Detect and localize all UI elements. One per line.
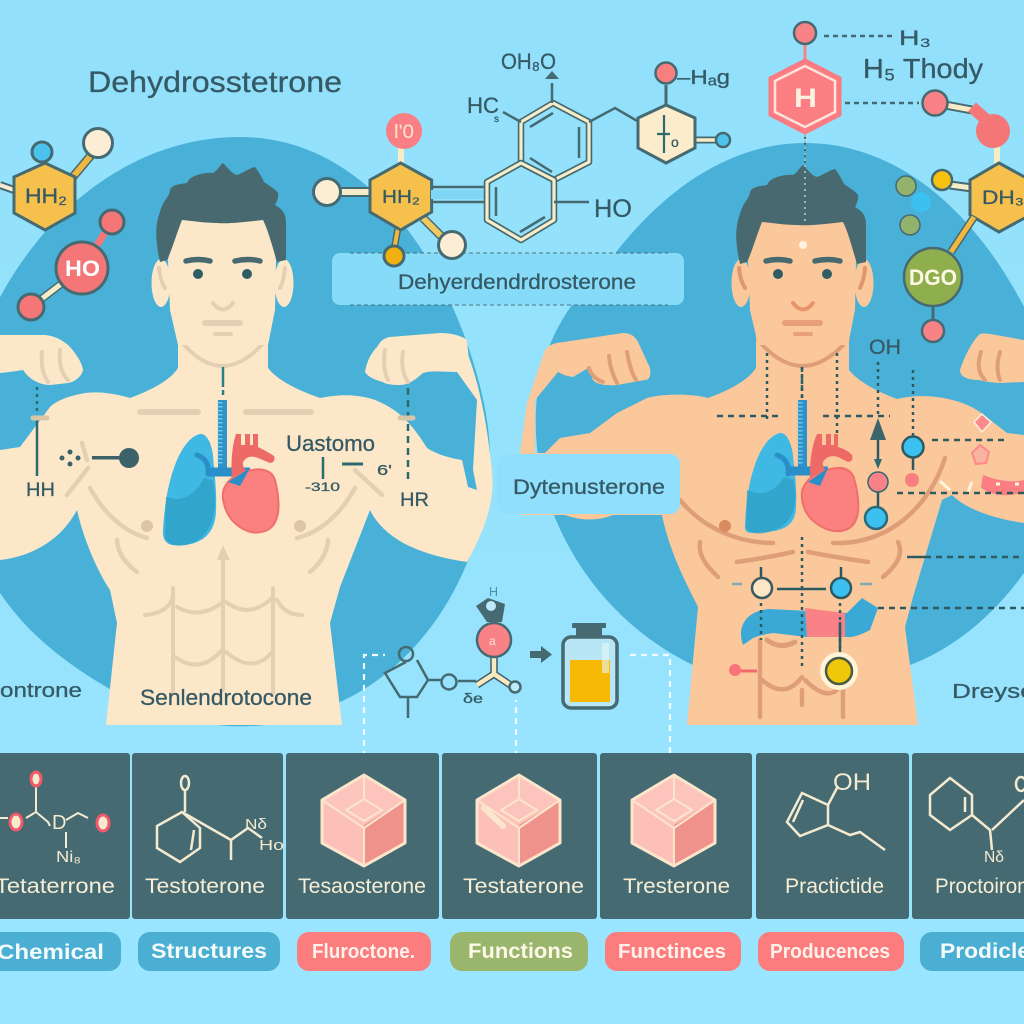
left figure marker with dots	[60, 448, 139, 468]
left label: HR: HR	[400, 490, 429, 511]
left torso and arms	[0, 300, 493, 725]
stomach	[741, 598, 878, 645]
molecule: right chain	[896, 90, 1024, 342]
left figure trachea	[208, 367, 250, 472]
left label: HH	[26, 387, 55, 501]
right figure heart	[802, 434, 858, 531]
card 5	[600, 753, 752, 919]
molecule: HO coral	[18, 210, 124, 320]
right figure arrow head down	[874, 459, 882, 469]
right figure trachea	[788, 367, 828, 471]
card 2: Nδ	[245, 816, 267, 833]
label: Dytenusterone	[497, 454, 680, 514]
molecule: right chain: DGO	[909, 265, 957, 290]
pill: Functions	[450, 932, 588, 971]
right figure left fist	[545, 333, 650, 385]
left label: Ustomo: 6'	[377, 462, 392, 479]
card 6	[756, 753, 909, 919]
label: Dehyerdendrdrosterone: Dehyerdendrdrosterone	[398, 271, 636, 294]
title: Dehydrosstetrone	[88, 66, 342, 99]
dashed connectors	[364, 655, 670, 768]
card 1	[0, 753, 130, 919]
HO label	[554, 201, 589, 203]
label: Dytenusterone: Dytenusterone	[513, 476, 665, 499]
molecule: top hexagon H: H₃	[899, 27, 931, 50]
left label: Ustomo: -310	[305, 480, 340, 494]
card 7	[912, 753, 1024, 919]
pill: Functions: Functions	[468, 940, 573, 963]
pill: Chemical	[0, 932, 121, 971]
connecting bond and cream hexagon	[589, 108, 639, 122]
pill: Structures: Structures	[151, 940, 267, 963]
molecule: right chain: DH₃	[982, 188, 1024, 209]
card 3: Tesaosterone	[298, 875, 426, 898]
molecule: central yellow hexagon with fused rings	[314, 49, 730, 266]
card 2: Ho	[259, 837, 284, 854]
right figure pink organ details	[905, 414, 1024, 495]
left label: Ustomo: Uastomo	[286, 431, 375, 456]
label: HS Thody: H₅ Thody	[863, 53, 983, 84]
pill: Flurotone	[297, 932, 431, 971]
left figure center arrow head	[217, 545, 230, 560]
left figure lung	[163, 434, 216, 546]
right figure body contour lines	[589, 340, 1000, 717]
bottom cards	[0, 753, 1024, 919]
icon: jar	[563, 623, 617, 708]
right figure	[520, 165, 1024, 725]
card 7: Nδ	[984, 849, 1004, 866]
card 2: Testoterone	[145, 875, 265, 898]
bottom pills	[0, 932, 1024, 971]
right figure arrow	[870, 418, 886, 440]
molecule: central yellow hexagon with fused rings: HO	[594, 195, 632, 223]
left figure left fist	[0, 335, 83, 385]
right figure connector lines	[717, 353, 1024, 667]
card 5: Tresterone	[623, 875, 730, 898]
molecule: central yellow hexagon with fused rings: o	[671, 134, 679, 150]
panel: right background circle	[536, 143, 1024, 665]
pill: Producences: Producences	[770, 941, 890, 963]
card 4: Testaterone	[463, 875, 584, 898]
left figure right fist	[365, 333, 470, 385]
pill: Prodicle	[920, 932, 1024, 971]
OH2O label: OH₈O	[501, 49, 556, 74]
left figure	[0, 163, 493, 725]
pill: Functinces: Functinces	[618, 941, 726, 963]
arrow	[530, 646, 552, 663]
left side caption: ontrone	[0, 680, 82, 702]
card 6: OH	[833, 769, 871, 796]
right figure right fist	[960, 333, 1024, 383]
pill: Producences	[758, 932, 904, 971]
molecule: HO coral: HO	[65, 256, 100, 281]
right figure head	[732, 165, 874, 345]
card 2	[132, 753, 284, 919]
left label: Ustomo	[286, 431, 392, 494]
molecule: top hexagon H: H	[794, 83, 817, 113]
pill: Structures	[138, 932, 280, 971]
molecule: central yellow hexagon with fused rings: l'0	[394, 122, 414, 143]
molecule: bottom center: a	[489, 634, 496, 648]
molecule: central yellow hexagon with fused rings: s	[494, 114, 499, 125]
pill: Prodicle: Prodicle	[940, 940, 1024, 963]
card 1: Ni₈	[56, 849, 81, 866]
right figure lung	[745, 433, 796, 534]
molecule: bottom center: δe	[463, 690, 483, 706]
molecule: central yellow hexagon with fused rings: HH₂	[382, 187, 420, 207]
pill: Flurotone: Fluroctone.	[312, 941, 415, 963]
OH label: OH	[869, 336, 901, 359]
left label: HR	[400, 388, 429, 511]
card 1: D	[52, 812, 66, 834]
left label: HH: HH	[26, 480, 55, 501]
molecule: central yellow hexagon with fused rings: –Hₐg	[677, 67, 730, 89]
fused ring B	[487, 163, 554, 240]
label: Dehyerdendrdrosterone	[332, 253, 684, 305]
left figure caption: Senlendrotocone	[140, 685, 312, 710]
molecule: left yellow hexagon: HH₂	[25, 185, 67, 208]
card 3	[286, 753, 439, 919]
molecule: left yellow hexagon	[0, 128, 112, 230]
left figure heart	[223, 434, 279, 533]
right figure nipple	[719, 520, 731, 532]
molecule: bottom center	[385, 584, 520, 718]
nodes on right figure	[729, 241, 924, 690]
left figure nipples	[141, 520, 306, 532]
left figure head	[152, 163, 294, 345]
molecule: bottom center: H	[489, 584, 498, 599]
panel: left background circle	[0, 137, 490, 726]
HC label: HC	[467, 93, 499, 118]
card 4	[442, 753, 597, 919]
card 6: Practictide	[785, 875, 884, 898]
molecule: top hexagon H	[770, 22, 931, 225]
fused ring A	[521, 103, 589, 180]
right side caption: Dreysot	[952, 681, 1024, 703]
left figure body contour lines	[42, 340, 408, 693]
right torso and arms	[520, 300, 1024, 725]
pill: Functinces	[605, 932, 741, 971]
